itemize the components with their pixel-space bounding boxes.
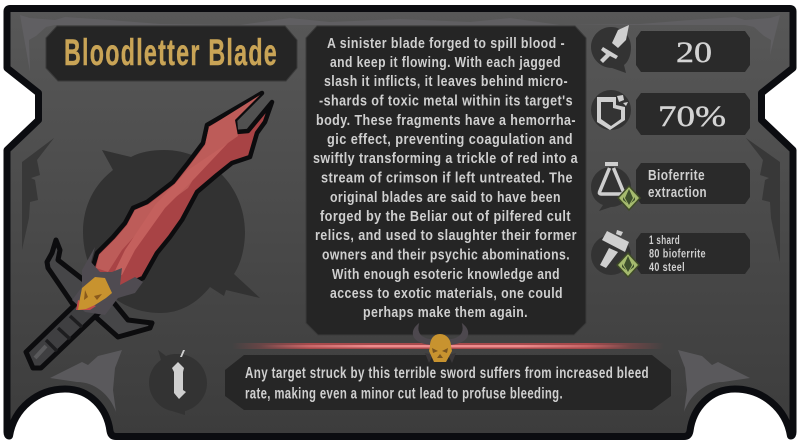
icon: hammer on dark circle [591, 230, 631, 275]
description text: With enough esoteric knowledge and [332, 267, 560, 283]
damage value: 20 [676, 36, 712, 69]
skull red backing [76, 300, 96, 310]
hammer [600, 230, 629, 268]
bottom-left light shard [50, 350, 122, 412]
sword illustration [26, 93, 272, 368]
icon glyph [597, 97, 625, 130]
icon backdrop [149, 350, 207, 415]
info icon [149, 350, 207, 415]
mid-right dark shard [746, 138, 780, 262]
hilt shine [35, 346, 46, 358]
description text: forged by the Beliar out of pilfered cult [320, 209, 571, 225]
description text: -shards of toxic metal within its target's [319, 94, 573, 110]
lower spikes [425, 353, 456, 363]
crafting costs [649, 233, 706, 274]
description text [313, 36, 578, 321]
flask cap [605, 162, 618, 166]
icon: shield on dark circle [591, 90, 631, 130]
horns [414, 325, 467, 344]
description text: owners and their psychic abominations. [322, 248, 570, 264]
icon: flask on dark circle [591, 162, 631, 211]
effect panel: rate, making even a minor cut lead to profuse bleeding. [245, 386, 563, 402]
red divider line [232, 343, 664, 349]
stat: crafting [591, 230, 750, 277]
mid-left dark shard [22, 138, 54, 250]
gold skull pommel [76, 277, 112, 310]
stat: damage [591, 25, 750, 73]
effect text: Any target struck by this terrible sword suffers from increased bleed [245, 365, 649, 382]
decorative corners, right side [400, 12, 780, 412]
icon glyph [600, 25, 629, 63]
icon backdrop [591, 235, 631, 275]
source text [648, 167, 707, 201]
bottom-right light shard [678, 350, 750, 412]
top band and corner mirrored [400, 12, 780, 55]
crafting costs: 80 bioferrite [649, 246, 706, 260]
description text: relics, and used to slaughter their former [315, 228, 577, 244]
decorative corners, left side [20, 12, 400, 412]
title panel [46, 26, 297, 81]
description panel [306, 26, 586, 335]
description text: body. These fragments have a hemorrha- [316, 113, 576, 129]
description text: gic effect, preventing coagulation and [327, 132, 573, 148]
crafting plate [636, 233, 750, 274]
crafting costs: 1 shard [649, 233, 680, 247]
title text: Bloodletter Blade [64, 32, 278, 73]
title plate [46, 26, 297, 81]
blade outline and base [92, 93, 272, 290]
description text: and keep it flowing. With each jagged [330, 55, 561, 71]
source plate [636, 163, 750, 204]
hilt wraps [46, 316, 82, 351]
armor value plate [636, 93, 750, 135]
description text: stream of crimson if left untreated. The [321, 170, 573, 186]
damage value plate [636, 31, 750, 72]
source text: Bioferrite [648, 167, 705, 184]
effect plate [225, 355, 671, 410]
skull eyes [432, 348, 448, 358]
crossguard arm lower-right [90, 298, 152, 337]
crafting costs: 40 steel [649, 260, 685, 274]
skull eyes [84, 290, 102, 300]
top band and corner [20, 12, 400, 72]
icon: sword on dark circle [591, 25, 631, 73]
description text: access to exotic materials, one could [330, 286, 563, 302]
icon: green bioferrite gem [617, 253, 639, 277]
icon backdrop [591, 90, 631, 130]
description plate [306, 26, 586, 335]
description text: A sinister blade forged to spill blood - [327, 36, 565, 52]
effect panel [225, 355, 671, 410]
guard collar [72, 247, 143, 315]
description text: original blades are said to have been [330, 190, 561, 206]
shield chip [617, 95, 628, 106]
skull [429, 334, 452, 362]
armor value: 70% [658, 100, 726, 133]
flask [599, 168, 624, 194]
emblem behind sword [83, 150, 260, 313]
icon backdrop [591, 167, 631, 211]
blade highlight [96, 95, 260, 272]
description text: slash it inflicts, it leaves behind micro- [324, 74, 568, 90]
stylised i [172, 350, 186, 399]
stat: source [591, 162, 750, 211]
description text: swiftly transforming a trickle of red into a [313, 151, 578, 167]
blade fuller streak [112, 143, 228, 277]
crossguard arm upper-left [47, 240, 90, 306]
description text: perhaps make them again. [363, 305, 528, 321]
blade [92, 93, 272, 290]
icon: green bioferrite gem [618, 186, 640, 210]
source text: extraction [648, 184, 707, 201]
skull [78, 277, 112, 310]
hilt [26, 292, 104, 368]
icon backdrop [591, 27, 631, 73]
skull ornament [414, 325, 467, 363]
stat: armor penetration [591, 90, 750, 135]
